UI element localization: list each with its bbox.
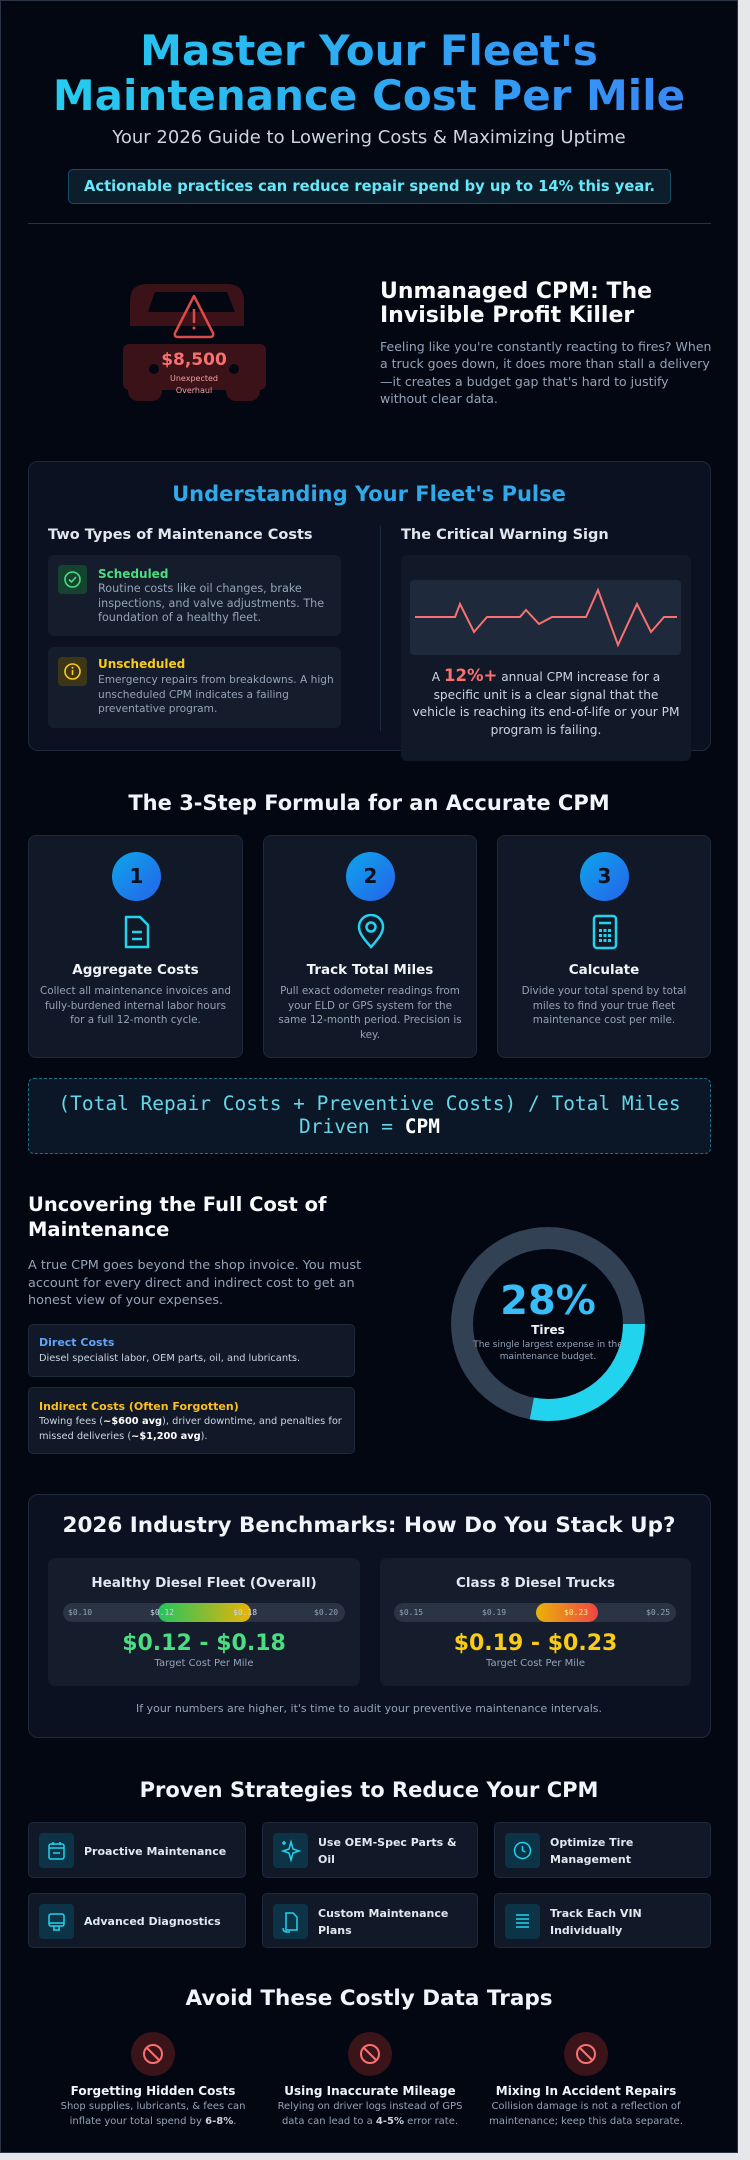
bar: range: $0.12 <box>150 1608 174 1617</box>
bar: range <box>63 1603 345 1622</box>
icon: calculator <box>592 914 618 950</box>
chart: tires donut: 28% <box>500 1278 596 1324</box>
icon: truck with warning: $8,500 <box>161 350 227 370</box>
strategy: tire management <box>494 1822 711 1878</box>
formula box <box>28 1078 711 1154</box>
bar: range: $0.19 <box>482 1608 506 1617</box>
heading: strategies: Proven Strategies to Reduce Your CPM <box>140 1778 598 1802</box>
step 3: Calculate <box>569 962 639 978</box>
icon: truck with warning: Unexpected <box>170 374 218 383</box>
card: scheduled: Scheduled <box>98 567 168 581</box>
step 2 <box>263 835 477 1058</box>
icon: info <box>58 657 87 686</box>
subheading: warning sign: The Critical Warning Sign <box>401 527 609 543</box>
step 2: Track Total Miles <box>307 962 433 978</box>
icon: truck with warning: Overhaul <box>176 386 212 395</box>
heading: 3-step formula: The 3-Step Formula for an Accurate CPM <box>128 791 610 815</box>
text: unmanaged CPM: Feeling like you're constantly reacting to fires? When a truck goes down, it does more than stall a delivery—it creates a budget gap that's hard to justify without clear data. <box>380 339 711 406</box>
card: indirect costs <box>28 1387 355 1454</box>
chart: tires donut: The single largest expense in the maintenance budget. <box>473 1340 623 1362</box>
strategy: custom plans: Custom Maintenance Plans <box>318 1906 448 1936</box>
heading: full cost: Uncovering the Full Cost of Maintenance <box>28 1193 326 1241</box>
card: unscheduled <box>48 647 341 728</box>
title: Master Your Fleet's <box>140 26 598 75</box>
bar: range <box>394 1603 676 1622</box>
step 1: Aggregate Costs <box>72 962 199 978</box>
strategy: track VIN: Track Each VIN Individually <box>550 1906 642 1936</box>
step 2: Pull exact odometer readings from your ELD or GPS system for the same 12-month period. Precision is key. <box>278 985 462 1041</box>
step 3: Divide your total spend by total miles to find your true fleet maintenance cost per mile. <box>522 985 686 1026</box>
step 1: 1 <box>130 864 143 888</box>
strategy: diagnostics <box>28 1893 246 1948</box>
panel: fleet pulse <box>28 461 711 751</box>
callout: repair spend <box>68 169 671 204</box>
bar: range: $0.20 <box>314 1608 338 1617</box>
benchmark: healthy fleet: $0.12 - $0.18 <box>122 1631 286 1656</box>
step 3: 3 <box>598 864 611 888</box>
strategy: custom plans <box>262 1893 478 1948</box>
trap: inaccurate mileage <box>278 2032 462 2126</box>
trap: inaccurate mileage: Relying on driver logs instead of GPS data can lead to a 4-5% error rate. <box>278 2101 462 2126</box>
chart: pulse line <box>410 580 681 655</box>
card: indirect costs: Indirect Costs (Often Forgotten) <box>39 1400 239 1413</box>
step 1: Collect all maintenance invoices and fully-burdened internal labor hours for a full 12-month cycle. <box>40 985 231 1026</box>
text: 12% warning: A 12%+ annual CPM increase for a specific unit is a clear signal that the vehicle is reaching its end-of-life or your PM program is failing. <box>412 666 680 736</box>
trap: accident repairs: Collision damage is not a reflection of maintenance; keep this data separate. <box>489 2101 683 2126</box>
chart: tires donut <box>451 1227 645 1421</box>
strategy: proactive maintenance <box>28 1822 246 1878</box>
icon: map pin <box>358 914 384 949</box>
subtitle: Your 2026 Guide to Lowering Costs & Maximizing Uptime <box>112 127 626 148</box>
icon: truck with warning <box>123 284 266 401</box>
trap: accident repairs: Mixing In Accident Repairs <box>496 2084 676 2098</box>
card: warning sign <box>401 555 691 761</box>
heading: unmanaged CPM <box>380 279 652 328</box>
strategy: proactive maintenance: Proactive Maintenance <box>84 1844 226 1858</box>
subheading: two types: Two Types of Maintenance Costs <box>48 527 313 543</box>
benchmark: healthy fleet: Target Cost Per Mile <box>154 1658 253 1669</box>
trap: hidden costs <box>61 2032 245 2126</box>
trap: inaccurate mileage: Using Inaccurate Mileage <box>284 2084 456 2098</box>
benchmark: healthy fleet <box>48 1558 360 1686</box>
card: scheduled <box>48 555 341 636</box>
icon: document <box>124 916 150 948</box>
heading: fleet pulse: Understanding Your Fleet's Pulse <box>172 482 566 506</box>
strategy: OEM parts: Use OEM-Spec Parts & Oil <box>318 1836 457 1866</box>
card: direct costs: Diesel specialist labor, OEM parts, oil, and lubricants. <box>39 1353 300 1364</box>
step 3 <box>497 835 711 1058</box>
benchmark: class 8 <box>380 1558 691 1686</box>
benchmark: class 8: Target Cost Per Mile <box>486 1658 585 1669</box>
heading: unmanaged CPM: Unmanaged CPM: The <box>380 279 652 304</box>
benchmark: class 8: Class 8 Diesel Trucks <box>456 1575 615 1591</box>
bar: range: $0.18 <box>233 1608 257 1617</box>
step 2: 2 <box>364 864 377 888</box>
card: unscheduled: Unscheduled <box>98 657 185 671</box>
note: benchmarks: If your numbers are higher, it's time to audit your preventive maintenance intervals. <box>136 1702 602 1715</box>
benchmark: class 8: $0.19 - $0.23 <box>454 1631 617 1656</box>
formula box: (Total Repair Costs + Preventive Costs) / Total Miles Driven = CPM <box>58 1092 681 1138</box>
panel: benchmarks <box>28 1494 711 1738</box>
card: indirect costs: Towing fees (~$600 avg), driver downtime, and penalties for missed deliveries (~$1,200 avg). <box>39 1416 342 1442</box>
title <box>1 28 737 118</box>
bar: range: $0.15 <box>399 1608 423 1617</box>
bar: range: $0.25 <box>646 1608 670 1617</box>
card: unscheduled: Emergency repairs from breakdowns. A high unscheduled CPM indicates a failing preventative program. <box>98 674 334 715</box>
heading: unmanaged CPM: Invisible Profit Killer <box>380 303 634 328</box>
callout: repair spend: Actionable practices can reduce repair spend by up to 14% this year. <box>84 178 655 195</box>
heading: data traps: Avoid These Costly Data Traps <box>185 1986 553 2011</box>
strategy: OEM parts <box>262 1822 478 1878</box>
bar: range: $0.10 <box>68 1608 92 1617</box>
trap: hidden costs: Shop supplies, lubricants, & fees can inflate your total spend by 6-8%. <box>61 2101 245 2126</box>
card: direct costs: Direct Costs <box>39 1336 114 1349</box>
trap: accident repairs <box>489 2032 683 2126</box>
step 1 <box>28 835 243 1058</box>
heading: benchmarks: 2026 Industry Benchmarks: How Do You Stack Up? <box>62 1513 676 1538</box>
benchmark: healthy fleet: Healthy Diesel Fleet (Overall) <box>91 1575 317 1591</box>
card: scheduled: Routine costs like oil changes, brake inspections, and valve adjustments. The foundation of a healthy fleet. <box>98 582 324 624</box>
text: full cost intro: A true CPM goes beyond the shop invoice. You must account for every direct and indirect cost to get an honest view of your expenses. <box>28 1258 361 1308</box>
chart: tires donut: Tires <box>531 1323 565 1337</box>
bar: range: $0.23 <box>564 1608 588 1617</box>
strategy: tire management: Optimize Tire Management <box>550 1836 633 1866</box>
trap: hidden costs: Forgetting Hidden Costs <box>71 2084 235 2098</box>
title: Maintenance Cost Per Mile <box>53 71 685 120</box>
icon: check <box>58 565 87 594</box>
strategy: diagnostics: Advanced Diagnostics <box>84 1915 221 1928</box>
strategy: track VIN <box>494 1893 711 1948</box>
card: direct costs <box>28 1324 355 1377</box>
